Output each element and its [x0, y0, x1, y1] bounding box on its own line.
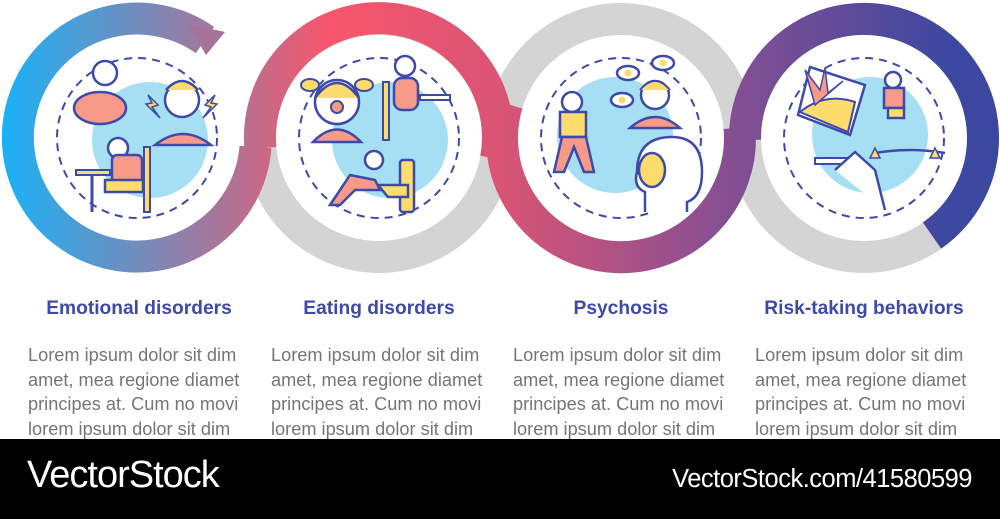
- text 2: lorem ipsum dolor sit dim: [271, 418, 473, 438]
- arrowhead: [188, 24, 225, 55]
- heading 1: Emotional disorders: [46, 298, 232, 319]
- text 3: amet, mea regione diamet: [513, 370, 724, 390]
- icon 2: eating: [299, 56, 459, 218]
- text 3: lorem ipsum dolor sit dim: [513, 418, 715, 438]
- text 1: principes at. Cum no movi: [28, 394, 238, 414]
- text 1: Lorem ipsum dolor sit dim: [28, 345, 236, 365]
- footer bar: [0, 439, 1000, 519]
- heading 3: Psychosis: [574, 298, 668, 319]
- heading 4: Risk-taking behaviors: [764, 298, 964, 319]
- text 1: amet, mea regione diamet: [28, 370, 239, 390]
- text 3: [513, 345, 724, 439]
- text 4: [755, 345, 966, 439]
- text 1: [28, 345, 240, 439]
- text 4: lorem ipsum dolor sit dim: [755, 418, 957, 438]
- icon 4: risk-taking: [784, 58, 945, 218]
- text 3: Lorem ipsum dolor sit dim: [513, 345, 721, 365]
- icon 3: psychosis: [541, 56, 702, 218]
- footer logo: VectorStock: [27, 454, 219, 496]
- footer url: VectorStock.com/41580599: [672, 465, 972, 493]
- text 4: principes at. Cum no movi: [755, 394, 965, 414]
- text 4: Lorem ipsum dolor sit dim: [755, 345, 963, 365]
- text 2: Lorem ipsum dolor sit dim: [271, 345, 479, 365]
- text 2: [271, 345, 482, 439]
- icon 1: emotional: [57, 58, 217, 218]
- ring 2 arc: [260, 18, 498, 159]
- text 2: principes at. Cum no movi: [271, 394, 481, 414]
- ring 3 arc: [502, 104, 740, 257]
- ring diagram: [2, 2, 999, 274]
- ring 1 arc: [18, 19, 256, 257]
- text 3: principes at. Cum no movi: [513, 394, 723, 414]
- heading 2: Eating disorders: [303, 298, 455, 319]
- text 4: amet, mea regione diamet: [755, 370, 966, 390]
- text 1: lorem ipsum dolor sit dim: [28, 418, 230, 438]
- ring 4 arc: [745, 19, 983, 236]
- text 2: amet, mea regione diamet: [271, 370, 482, 390]
